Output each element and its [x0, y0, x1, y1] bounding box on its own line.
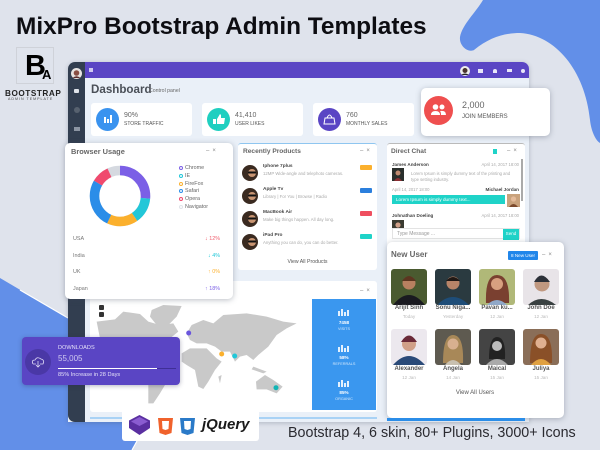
icon: flag [507, 69, 512, 72]
new user blue underline [387, 418, 525, 421]
icon: bag [318, 108, 341, 131]
date: sonu: Yesterday [443, 314, 463, 319]
button [508, 251, 538, 260]
row: japan: Japan [73, 286, 88, 292]
map zoom in [98, 304, 104, 310]
stats column [312, 299, 376, 410]
photo: pavan [479, 269, 515, 305]
avatar 2 [507, 194, 520, 207]
map zoom out [98, 312, 104, 316]
description 1: 12MP Wide-angle and telephoto cameras. [263, 171, 343, 176]
badge [493, 149, 497, 154]
heading: Browser Usage [71, 147, 125, 156]
avatar 3 [392, 220, 404, 228]
row: japan [73, 286, 220, 292]
label: USER LIKES [235, 121, 264, 127]
legend: firefox: FireFox [185, 181, 203, 187]
row: usa: ↓ 12% [205, 236, 220, 242]
message 1 [411, 171, 510, 182]
tech logos strip [122, 408, 259, 441]
value: 41,410 [235, 112, 256, 119]
date: alexander: 12 Jan [402, 375, 416, 380]
stat: organic: 85% [339, 390, 349, 395]
panel: recently products [238, 143, 377, 270]
world map [96, 305, 296, 404]
button: 8 New User [511, 253, 535, 258]
scrollbar [521, 159, 523, 201]
panel: new user [387, 242, 564, 418]
stat card: monthly sales [313, 103, 414, 136]
logo [5, 47, 61, 101]
sender 1: James Anderson [392, 162, 429, 167]
date: juliya: 15 Jan [534, 375, 548, 380]
logo: B [25, 50, 46, 82]
heading: Direct Chat [391, 148, 426, 155]
dashboard window [68, 62, 529, 422]
row: uk: UK [73, 269, 80, 275]
caption: Bootstrap 4, 6 skin, 80+ Plugins, 3000+ Icons [288, 425, 576, 441]
wordmark: jquery: jQuery [202, 416, 250, 433]
legend: safari: Safari [185, 188, 199, 194]
heading: Recently Products [243, 148, 301, 155]
description 4: Anything you can do, you can do better. [263, 240, 338, 245]
avatar 1 [242, 165, 258, 181]
logo: BOOTSTRAP [5, 89, 61, 98]
label: MONTHLY SALES [346, 121, 388, 127]
content heading: Dashboard [91, 83, 152, 96]
top bar [85, 62, 529, 78]
donut chart [90, 166, 150, 226]
panel controls: –× [360, 288, 373, 294]
row: usa: USA [73, 236, 84, 242]
message 1: Lorem Ipsum is simply dummy text of the printing and [411, 171, 510, 176]
value: 55,005 [58, 354, 82, 363]
content heading: Control panel [149, 88, 180, 94]
description 3: Make big things happen. All day long. [263, 217, 334, 222]
panel controls: –× [360, 148, 373, 154]
input [392, 228, 520, 239]
legend: opera: Opera [185, 196, 200, 202]
row: india: India [73, 253, 85, 259]
map card bottom line [90, 417, 377, 418]
row: india: ↓ 4% [208, 253, 220, 259]
legend: chrome: Chrome [185, 165, 204, 171]
icon: cloud download [25, 349, 51, 375]
date 3: April 14, 2017 18:00 [482, 213, 519, 218]
avatar 4 [242, 234, 258, 250]
row: japan: ↑ 18% [205, 286, 220, 292]
photo: john [523, 269, 559, 305]
title: MixPro Bootstrap Admin Templates [16, 13, 427, 40]
legend: navigator: Navigator [185, 204, 208, 210]
name: john: John Doe [527, 305, 555, 311]
icon: menu [89, 68, 93, 72]
value: 90% [124, 112, 138, 119]
date: john: 12 Jan [534, 314, 548, 319]
heading: New User [391, 250, 427, 259]
sidebar [68, 62, 85, 422]
photo: alexander [391, 329, 427, 365]
icon: gear [521, 69, 525, 73]
logo: A [42, 67, 51, 82]
label: referrals: REFERRALS [333, 362, 355, 366]
icon: sidebar home [74, 89, 79, 93]
callout: downloads [22, 337, 180, 385]
photo: angela [435, 329, 471, 365]
badge 3 [360, 211, 372, 216]
date: maical: 15 Jan [490, 375, 504, 380]
label: visits: VISITS [338, 327, 350, 331]
message 1: type setting industry. [411, 177, 449, 182]
badge 4 [360, 234, 372, 239]
label: JOIN MEMBERS [462, 114, 508, 120]
table [73, 236, 220, 292]
row: india [73, 253, 220, 259]
icon: mail [478, 69, 483, 73]
product list [242, 164, 372, 250]
date: arijit: Today [403, 314, 415, 319]
icon: thumb [207, 108, 230, 131]
icon: bootstrap [128, 415, 151, 435]
panel controls: –× [507, 148, 520, 154]
name 4: iPad Pro [263, 233, 282, 238]
badge 2 [360, 188, 372, 193]
label: DOWNLOADS [58, 345, 95, 351]
date 2: April 14, 2017 18:00 [392, 187, 429, 192]
stat: referrals: 58% [339, 355, 349, 360]
sender 3: Johnathan Doeling [392, 213, 433, 218]
stat card: store traffic [91, 103, 192, 136]
content heading [91, 83, 180, 96]
icon: css3 [180, 415, 195, 435]
avatar 3 [242, 211, 258, 227]
icon: referrals [338, 345, 349, 352]
description 2: Library | For You | Browse | Radio [263, 194, 327, 199]
icon: organic [338, 380, 349, 387]
legend: ie: IE [185, 173, 190, 179]
name 2: Apple Tv [263, 187, 283, 192]
value: 2,000 [462, 100, 485, 110]
name: angela: Angela [443, 366, 463, 372]
photo: sonu [435, 269, 471, 305]
row: usa [73, 236, 220, 242]
bubble [392, 195, 505, 204]
link: view all users: View All Users [456, 390, 494, 396]
photo: maical [479, 329, 515, 365]
icon: sidebar mail [74, 127, 80, 131]
date: pavan: 12 Jan [490, 314, 504, 319]
caption: 85% Increase in 28 Days [58, 372, 120, 378]
panel: browser usage [65, 143, 233, 299]
link: view all products: View All Products [288, 259, 327, 265]
send button: Send [506, 231, 516, 236]
progress bar [58, 368, 176, 369]
label: organic: ORGANIC [335, 397, 353, 401]
bubble: Lorem Ipsum is simply dummy text... [396, 197, 471, 202]
date 1: April 14, 2017 18:00 [482, 162, 519, 167]
date: angela: 14 Jan [446, 375, 460, 380]
photo: juliya [523, 329, 559, 365]
name: sonu: Sonu Niga... [436, 305, 470, 311]
name: maical: Maical [488, 366, 506, 372]
logo: ADMIN TEMPLATE [8, 97, 53, 101]
callout: join members [421, 88, 550, 136]
stat card: user likes [202, 103, 303, 136]
icon: visits [338, 309, 349, 316]
panel: map [90, 281, 377, 412]
avatar 1 [392, 168, 404, 181]
icon: members [424, 96, 453, 125]
icon: sidebar globe [74, 107, 80, 113]
icon: bell [493, 69, 497, 73]
name 3: MacBook Air [263, 210, 292, 215]
icon: user avatar [460, 66, 470, 76]
avatar 2 [242, 188, 258, 204]
row: uk [73, 269, 220, 275]
stat: visits: 7458 [339, 320, 349, 325]
name: pavan: Pavan ku... [481, 305, 513, 311]
name: alexander: Alexander [394, 366, 424, 372]
icon: sidebar avatar [71, 68, 82, 79]
badge 1 [360, 165, 372, 170]
icon: chart [96, 108, 119, 131]
name: juliya: Juliya [532, 366, 550, 372]
legend [179, 165, 208, 210]
name 1: Iphone 7plus [263, 164, 293, 169]
label: STORE TRAFFIC [124, 121, 164, 127]
sender 2: Michael Jordan [486, 187, 519, 192]
panel: direct chat [387, 143, 525, 248]
send button [503, 229, 519, 240]
panel controls: –× [542, 252, 555, 258]
input: Type Message ... [397, 231, 435, 237]
name: arijit: Arijit Sinh [395, 305, 423, 311]
row: uk: ↑ 0% [208, 269, 220, 275]
photo: arijit [391, 269, 427, 305]
panel controls: –× [206, 148, 219, 154]
value: 760 [346, 112, 358, 119]
icon: html5 [158, 415, 173, 435]
